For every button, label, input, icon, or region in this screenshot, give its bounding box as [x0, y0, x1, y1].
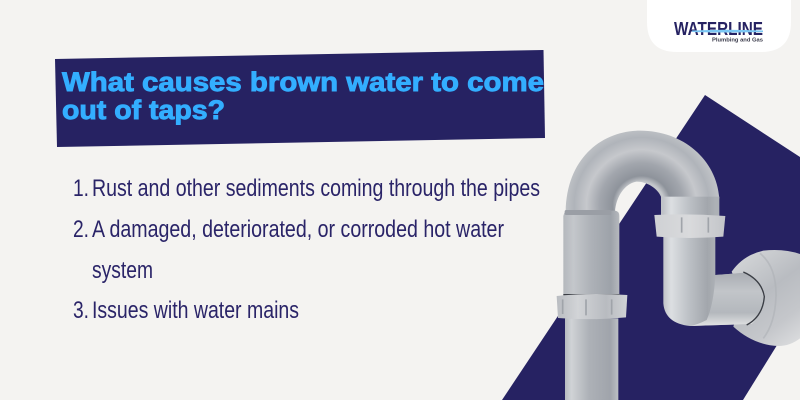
- item 2: system: [92, 257, 153, 284]
- left coupling nut: [557, 294, 627, 319]
- title text: What causes brown water to come: [62, 67, 544, 97]
- navy diagonal shape: [502, 95, 800, 400]
- item 2: A damaged, deteriorated, or corroded hot water: [92, 216, 504, 243]
- silver P-trap pipe: [557, 131, 800, 400]
- lower vertical pipe: [565, 318, 618, 400]
- outlet elbow: [663, 237, 764, 326]
- item 1: 1.: [73, 175, 89, 202]
- title banner: out of taps?: [62, 95, 225, 125]
- logo water wave: [692, 30, 763, 32]
- item 3: 3.: [73, 297, 89, 324]
- numbered list: [73, 175, 540, 324]
- wall flange: [732, 250, 800, 346]
- item 2: [73, 216, 504, 284]
- upper right collar: [661, 197, 719, 216]
- right coupling nut: [654, 214, 725, 238]
- logo wordmark: WATERLINE: [674, 19, 763, 39]
- left collar top lip: [565, 210, 611, 215]
- arch bend: [566, 131, 719, 212]
- item 2: 2.: [73, 216, 89, 243]
- title banner: [55, 50, 545, 147]
- left collar seal: [563, 294, 620, 296]
- logo tagline: Plumbing and Gas: [712, 38, 763, 44]
- flange inner ring: [760, 253, 776, 338]
- item 1: Rust and other sediments coming through the pipes: [92, 175, 540, 202]
- outlet seal: [743, 272, 764, 325]
- item 3: Issues with water mains: [92, 297, 299, 324]
- tall left collar: [563, 211, 619, 295]
- logo badge: [647, 0, 791, 52]
